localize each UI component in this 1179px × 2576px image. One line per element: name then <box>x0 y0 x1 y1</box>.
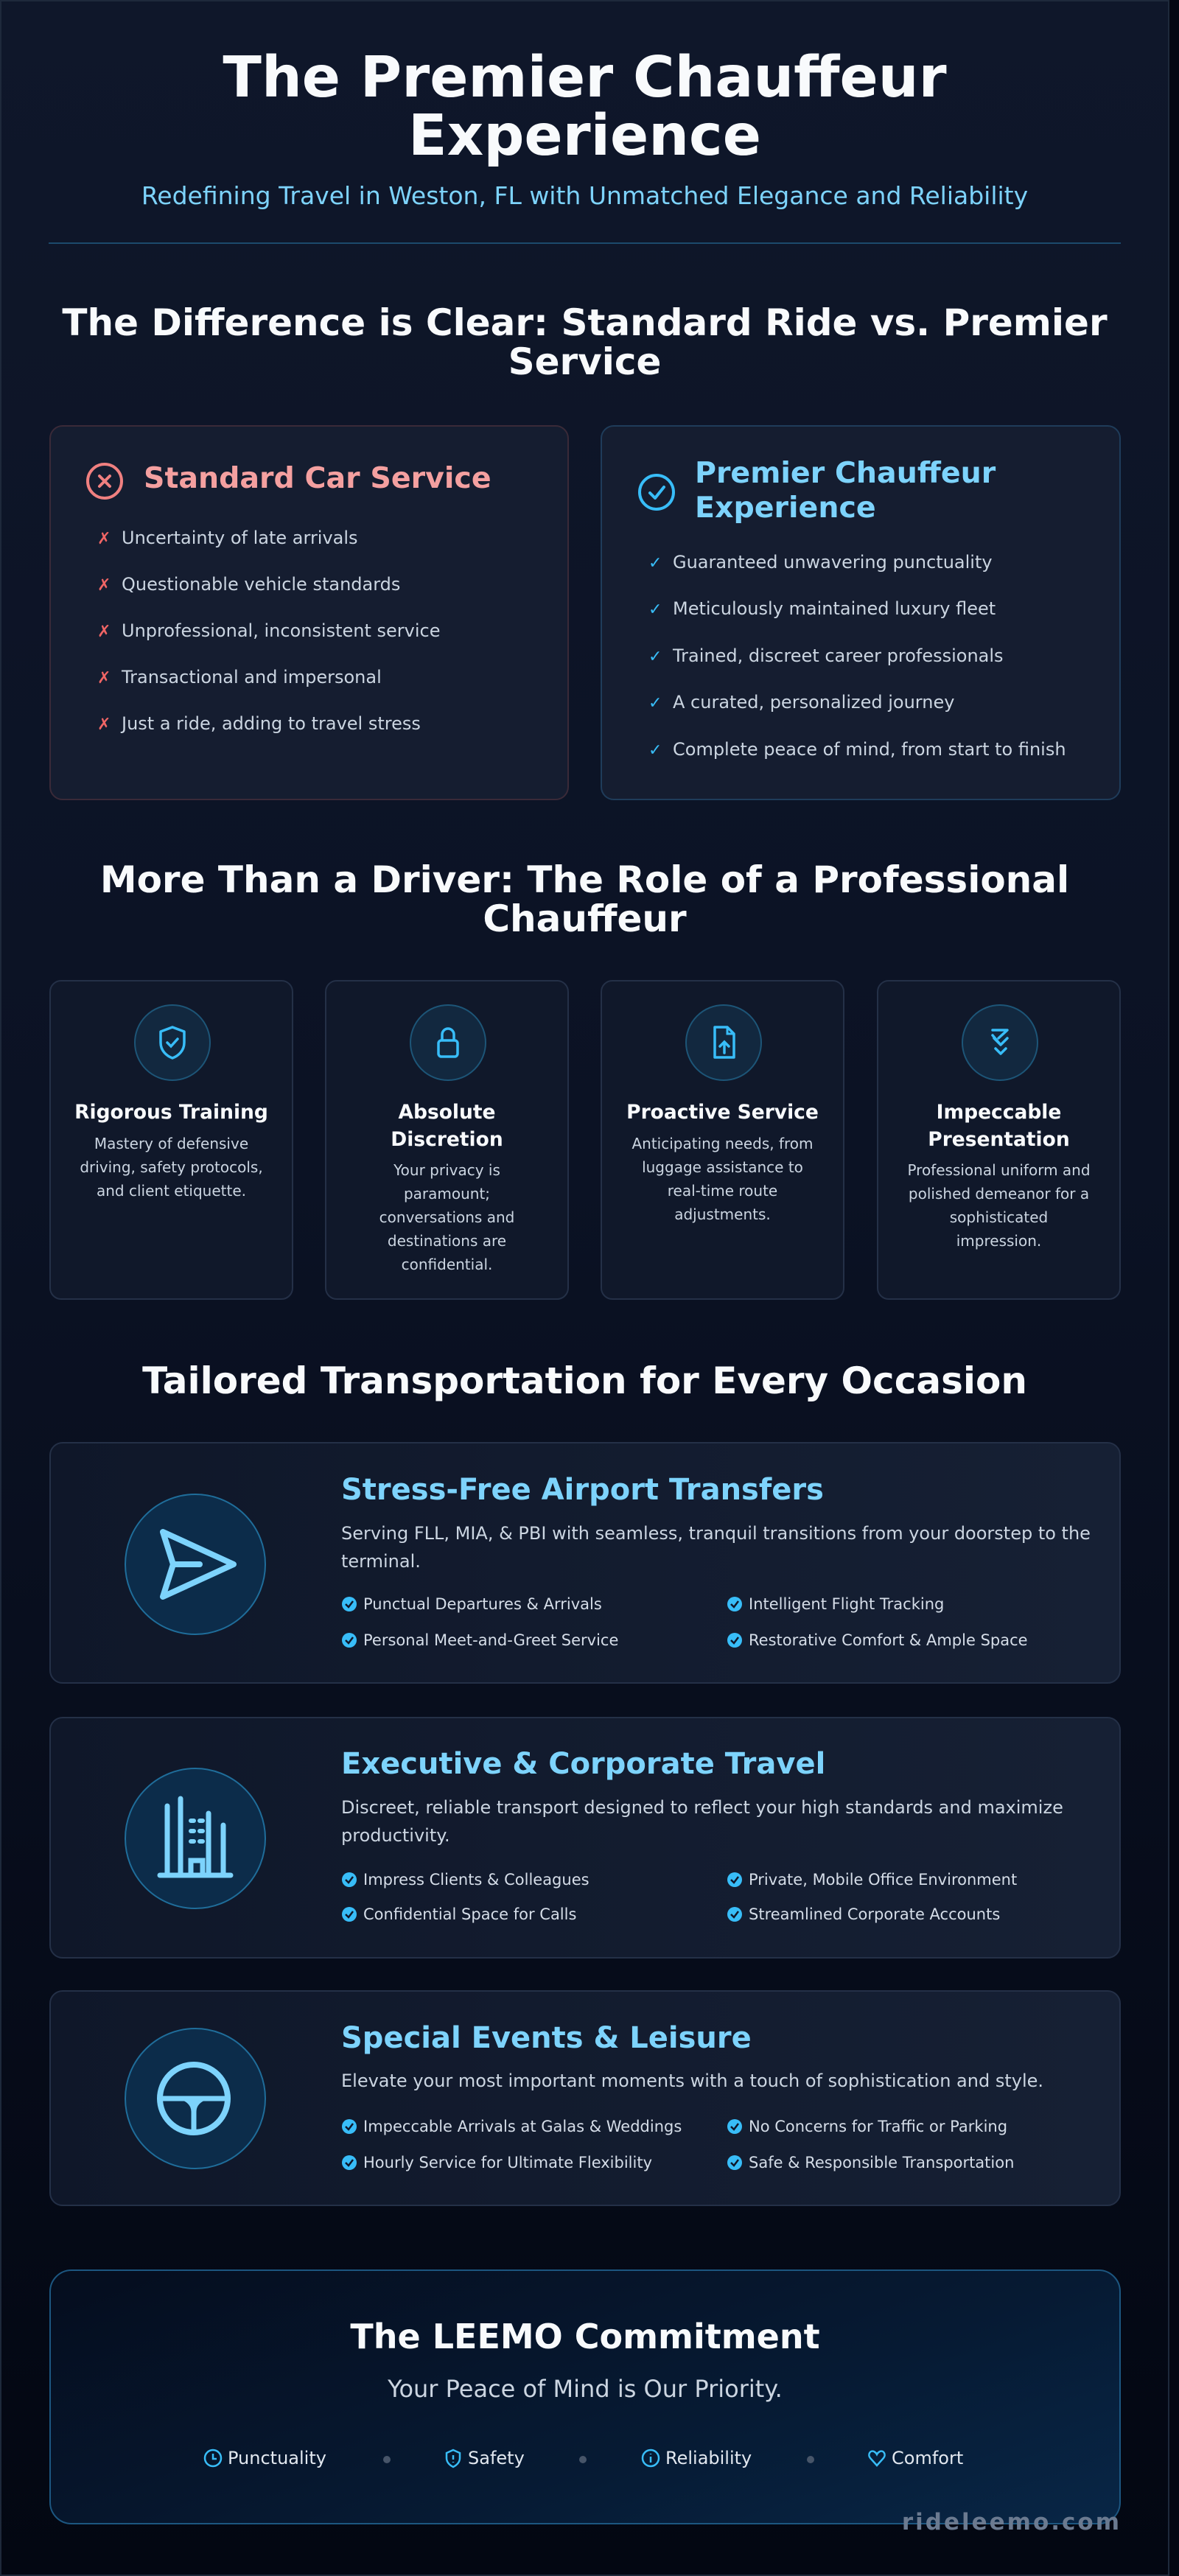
panel: corporate travel <box>49 1717 1121 1959</box>
heading: premier: Premier Chauffeur <box>695 456 996 490</box>
list: premier benefits <box>648 552 1066 760</box>
values row <box>203 2448 963 2468</box>
icon: building <box>125 1768 266 1909</box>
panel: LEEMO commitment <box>49 2269 1121 2524</box>
feature bullets <box>342 1595 1028 1649</box>
panel: rigorous training: driving, safety protocols, <box>80 1158 263 1176</box>
icon: chevrons <box>962 1004 1038 1081</box>
list: premier benefits: A curated, personalized journey <box>673 692 954 713</box>
feature bullets: Private, Mobile Office Environment <box>749 1871 1017 1889</box>
tagline: Your Peace of Mind is Our Priority. <box>388 2375 783 2403</box>
list: standard drawbacks: ✗ <box>97 715 111 734</box>
panel: absolute discretion: conversations and <box>379 1208 514 1226</box>
panel: airport transfers: Stress-Free Airport Transfers <box>341 1473 824 1507</box>
list: standard drawbacks: ✗ <box>97 623 111 641</box>
icon: shield check <box>134 1004 211 1081</box>
list: premier benefits: Trained, discreet career professionals <box>673 645 1004 666</box>
panel: proactive service: real-time route <box>668 1182 777 1200</box>
feature bullets <box>342 1871 1017 1923</box>
panel: impeccable presentation: polished demeanor for a <box>909 1185 1089 1203</box>
values row: Comfort <box>892 2448 963 2468</box>
feature bullets: Safe & Responsible Transportation <box>749 2154 1014 2171</box>
title <box>223 45 947 169</box>
panel: absolute discretion: Your privacy is <box>393 1161 500 1179</box>
panel: impeccable presentation: Presentation <box>928 1128 1070 1151</box>
heading: role of chauffeur <box>100 858 1069 940</box>
panel: special events: Special Events & Leisure <box>341 2021 752 2055</box>
icon: file upload <box>685 1004 762 1081</box>
panel: airport transfers: Serving FLL, MIA, & PBI with seamless, tranquil transitions from your doorstep to the terminal. <box>341 1523 1091 1572</box>
heading: standard car service: Standard Car Service <box>144 461 491 495</box>
list: premier benefits: ✓ <box>648 741 662 760</box>
heading: role of chauffeur: More Than a Driver: The Role of a Professional <box>100 858 1069 901</box>
list: premier benefits: ✓ <box>648 694 662 713</box>
heading: commitment: The LEEMO Commitment <box>350 2317 820 2356</box>
feature bullets: Intelligent Flight Tracking <box>749 1595 944 1613</box>
feature bullets: Confidential Space for Calls <box>363 1905 576 1923</box>
list: standard drawbacks: ✗ <box>97 576 111 595</box>
heading: comparison <box>62 301 1108 383</box>
heading: occasions: Tailored Transportation for Every Occasion <box>142 1359 1027 1402</box>
feature bullets: Impress Clients & Colleagues <box>363 1871 590 1889</box>
panel: standard car service <box>49 425 569 800</box>
icon: x circle <box>86 463 123 500</box>
icon: steering wheel <box>125 2028 266 2169</box>
panel: absolute discretion: paramount; <box>404 1185 490 1203</box>
panel: impeccable presentation <box>877 980 1121 1300</box>
title: Experience <box>408 103 761 169</box>
panel: absolute discretion <box>325 980 569 1300</box>
list: premier benefits: Complete peace of mind, from start to finish <box>673 739 1066 760</box>
list: premier benefits: Meticulously maintained luxury fleet <box>673 598 996 619</box>
list: premier benefits: ✓ <box>648 601 662 619</box>
list: standard drawbacks: Just a ride, adding to travel stress <box>122 713 421 734</box>
panel: special events <box>49 1990 1121 2206</box>
feature bullets: No Concerns for Traffic or Parking <box>749 2118 1007 2135</box>
panel: rigorous training <box>49 980 293 1300</box>
list: standard drawbacks: ✗ <box>97 530 111 548</box>
icon: paper plane <box>125 1494 266 1635</box>
panel: rigorous training: Mastery of defensive <box>94 1135 248 1152</box>
list: standard drawbacks: Unprofessional, inconsistent service <box>122 620 441 641</box>
panel: airport transfers <box>49 1442 1121 1684</box>
panel: proactive service: adjustments. <box>674 1205 771 1223</box>
list: premier benefits: Guaranteed unwavering punctuality <box>673 552 993 573</box>
title: The Premier Chauffeur <box>223 45 947 111</box>
panel: special events: Elevate your most important moments with a touch of sophistication and style. <box>341 2071 1043 2091</box>
panel: impeccable presentation: impression. <box>956 1232 1041 1250</box>
list: premier benefits: ✓ <box>648 648 662 666</box>
list: standard drawbacks: Transactional and impersonal <box>122 667 382 687</box>
panel: impeccable presentation: Impeccable <box>937 1101 1061 1124</box>
feature bullets <box>342 2118 1014 2171</box>
panel: proactive service: Proactive Service <box>626 1101 819 1124</box>
panel: absolute discretion: Absolute <box>398 1101 496 1124</box>
panel: absolute discretion: confidential. <box>402 1256 492 1273</box>
icon: check circle <box>638 474 675 511</box>
heading: comparison: The Difference is Clear: Standard Ride vs. Premier <box>62 301 1108 344</box>
feature bullets: Restorative Comfort & Ample Space <box>749 1631 1028 1649</box>
feature bullets: Personal Meet-and-Greet Service <box>363 1631 618 1649</box>
heading: role of chauffeur: Chauffeur <box>483 897 687 940</box>
panel: proactive service <box>601 980 844 1300</box>
values row: Punctuality <box>228 2448 326 2468</box>
feature bullets: Punctual Departures & Arrivals <box>363 1595 602 1613</box>
list: standard drawbacks <box>97 528 441 734</box>
panel: premier chauffeur experience <box>601 425 1121 800</box>
icon: lock <box>410 1004 486 1081</box>
panel: proactive service: luggage assistance to <box>642 1158 803 1176</box>
values row: Reliability <box>665 2448 752 2468</box>
panel: impeccable presentation: Professional uniform and <box>907 1161 1091 1179</box>
feature bullets: Impeccable Arrivals at Galas & Weddings <box>363 2118 682 2135</box>
list: premier benefits: ✓ <box>648 554 662 573</box>
list: standard drawbacks: Questionable vehicle standards <box>122 574 400 595</box>
heading: comparison: Service <box>508 340 661 383</box>
panel: impeccable presentation: sophisticated <box>950 1208 1048 1226</box>
panel: corporate travel: Discreet, reliable transport designed to reflect your high standards and maximize productivity. <box>341 1797 1063 1846</box>
heading: premier <box>695 456 996 525</box>
panel: absolute discretion: destinations are <box>388 1232 506 1250</box>
panel: rigorous training: and client etiquette. <box>97 1182 246 1200</box>
feature bullets: Hourly Service for Ultimate Flexibility <box>363 2154 652 2171</box>
footer: website: rideleemo.com <box>902 2509 1122 2535</box>
panel: rigorous training: Rigorous Training <box>74 1101 268 1124</box>
list: standard drawbacks: ✗ <box>97 669 111 687</box>
values row: Safety <box>468 2448 525 2468</box>
panel: proactive service: Anticipating needs, from <box>632 1135 814 1152</box>
list: standard drawbacks: Uncertainty of late arrivals <box>122 528 358 548</box>
subtitle: Redefining Travel in Weston, FL with Unmatched Elegance and Reliability <box>141 181 1028 210</box>
panel: absolute discretion: Discretion <box>391 1128 503 1151</box>
feature bullets: Streamlined Corporate Accounts <box>749 1905 1000 1923</box>
panel: corporate travel: Executive & Corporate Travel <box>341 1747 825 1781</box>
heading: premier: Experience <box>695 491 876 525</box>
